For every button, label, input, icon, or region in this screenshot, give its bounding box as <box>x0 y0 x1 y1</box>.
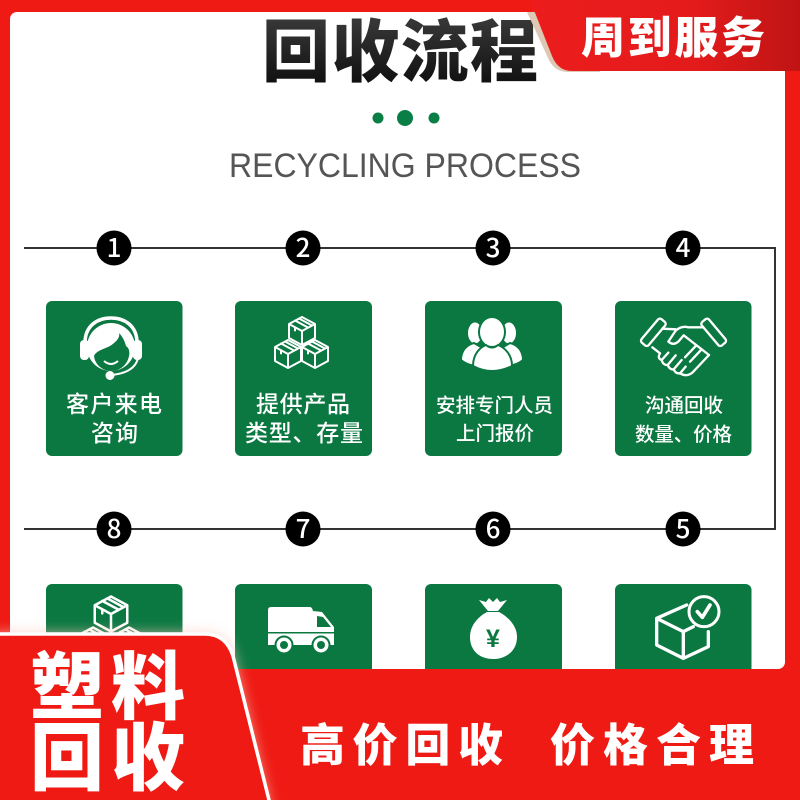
title: 回收流程 <box>262 15 538 91</box>
ribbon: service badge <box>527 0 800 72</box>
card 7: delivery <box>235 584 372 674</box>
icon: money bag: ¥ <box>486 625 500 653</box>
step number 1: 1 <box>107 228 121 265</box>
step number 2: 2 <box>296 228 310 265</box>
step number 3: 3 <box>486 228 500 265</box>
card 5: inspection <box>615 584 752 674</box>
card 8: lower left <box>46 584 182 674</box>
icon: headset agent <box>80 318 142 380</box>
card 2: provide product info <box>235 301 372 456</box>
card 3: arrange staff <box>425 301 562 456</box>
step number 5 <box>666 509 700 546</box>
icon: boxes <box>77 596 145 662</box>
step number 4: 4 <box>676 228 691 265</box>
card 1: customer call: 客户来电 <box>66 391 162 417</box>
step number 2 <box>286 228 320 266</box>
card 3: arrange staff: 安排专门人员 <box>436 395 553 417</box>
step number 8 <box>96 509 132 546</box>
card 6: payment <box>425 584 562 674</box>
icon: stacked boxes <box>275 317 328 368</box>
step number 7: 7 <box>296 509 310 546</box>
icon: group of people <box>461 317 523 371</box>
card 2: provide product info: 提供产品 <box>256 391 350 417</box>
step number 3 <box>476 228 510 266</box>
card 1: customer call <box>46 301 182 456</box>
icon: box with check mark <box>657 597 719 658</box>
icon: truck <box>268 607 334 654</box>
process connector line <box>24 248 775 529</box>
step number 6 <box>476 509 510 546</box>
bottom red band <box>0 669 800 800</box>
card 2: provide product info: 类型、存量 <box>245 420 363 446</box>
subtitle: RECYCLING PROCESS <box>229 147 581 185</box>
card 1: customer call: 咨询 <box>91 420 138 446</box>
step number 7 <box>286 509 320 546</box>
icon: handshake <box>640 318 727 375</box>
slogan: high price: 高价回收 <box>300 720 503 771</box>
white content panel <box>10 12 785 669</box>
card 4: communicate <box>615 301 752 456</box>
card 4: communicate: 数量、价格 <box>635 424 732 446</box>
step number 4 <box>666 228 700 266</box>
corner tab: plastic recycling: 回收 <box>30 717 185 800</box>
corner tab: plastic recycling <box>0 634 270 800</box>
step number 5: 5 <box>676 509 690 546</box>
step number 8: 8 <box>107 509 121 546</box>
slogan: fair price: 价格合理 <box>550 720 754 771</box>
decorative dots <box>372 110 440 126</box>
card 3: arrange staff: 上门报价 <box>456 423 534 445</box>
corner tab: plastic recycling: 塑料 <box>30 646 185 729</box>
ribbon: service badge: 周到服务 <box>581 14 765 63</box>
step number 6: 6 <box>486 509 500 546</box>
card 4: communicate: 沟通回收 <box>645 395 723 417</box>
step number 1 <box>96 228 132 266</box>
